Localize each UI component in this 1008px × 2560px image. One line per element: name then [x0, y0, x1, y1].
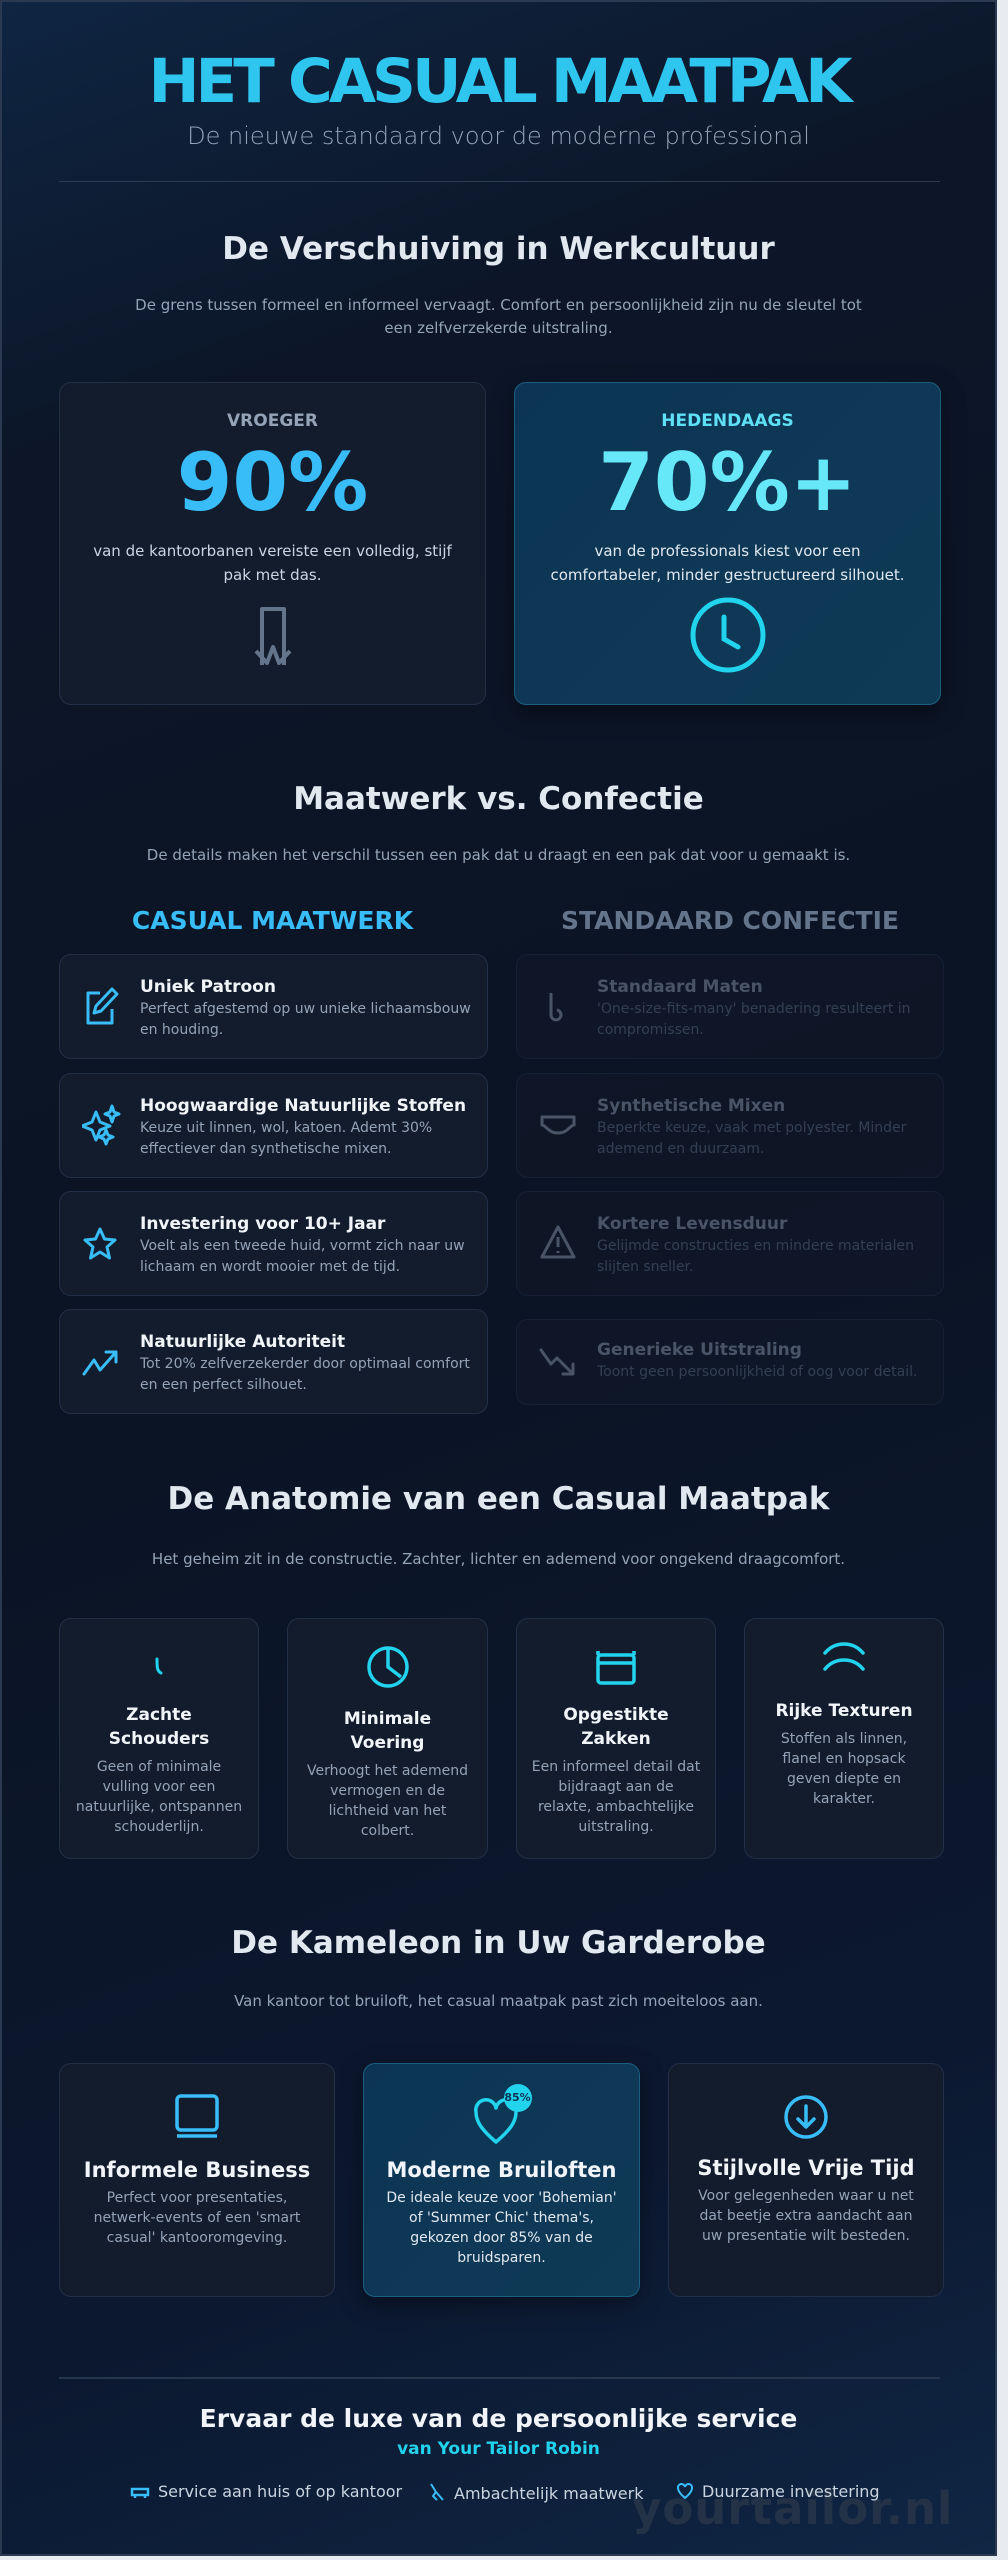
- icon: pocket: [596, 1651, 636, 1685]
- intro text: Van kantoor tot bruiloft, het casual maatpak past zich moeiteloos aan.: [234, 1992, 763, 2010]
- footer subheading: van Your Tailor Robin: [397, 2439, 600, 2459]
- card: rijke texturen: Stoffen als linnen, flanel en hopsack geven diepte en karakter.: [781, 1731, 907, 1807]
- watermark: yourtailor.nl: [632, 2482, 953, 2535]
- row: autoriteit: Tot 20% zelfverzekerder door optimaal comfort en een perfect silhouet.: [140, 1356, 470, 1393]
- icon: pie: [367, 1646, 409, 1688]
- row: kortere levensduur: [516, 1191, 944, 1296]
- row: synthetische mixen: Synthetische Mixen: [597, 1096, 785, 1116]
- icon: pencil: [86, 987, 119, 1024]
- stat: 70%+: 70%+: [598, 436, 857, 529]
- icon: clock: [690, 598, 766, 672]
- icon: trending down: [540, 1348, 574, 1376]
- card: minimale voering: [287, 1618, 488, 1859]
- footer features: [130, 2482, 880, 2503]
- card: rijke texturen: [744, 1618, 944, 1859]
- row: investering: Investering voor 10+ Jaar: [140, 1214, 385, 1234]
- icon: heart with badge: [474, 2084, 532, 2144]
- heading: anatomie: De Anatomie van een Casual Maatpak: [167, 1481, 830, 1517]
- card: informele business: [59, 2063, 335, 2297]
- card: informele business: Informele Business: [84, 2158, 310, 2182]
- row: kortere levensduur: Gelijmde constructies en mindere materialen slijten sneller.: [597, 1238, 914, 1275]
- icon: star: [83, 1228, 116, 1260]
- icon: laptop: [175, 2094, 219, 2138]
- card: zachte schouders: [59, 1618, 259, 1859]
- row: standaard maten: 'One-size-fits-many' benadering resulteert in compromissen.: [597, 1001, 911, 1038]
- card: opgestikte zakken: [516, 1618, 716, 1859]
- heading: werkcultuur: De Verschuiving in Werkcultuur: [222, 231, 775, 267]
- column heading: casual maatwerk: CASUAL MAATWERK: [132, 906, 413, 935]
- card: opgestikte zakken: Een informeel detail dat bijdraagt aan de relaxte, ambachtelijke uitstraling.: [532, 1759, 700, 1835]
- intro text: [135, 296, 862, 337]
- icon: heart with badge: 85%: [504, 2091, 531, 2104]
- row: synthetische mixen: Beperkte keuze, vaak met polyester. Minder ademend en duurzaam.: [597, 1120, 906, 1157]
- card: informele business: Perfect voor presentaties, netwerk-events of een 'smart casual' kantooromgeving.: [94, 2190, 300, 2246]
- row: uniek patroon: Uniek Patroon: [140, 977, 276, 997]
- icon: waves: [823, 1642, 865, 1671]
- row: generieke uitstraling: Generieke Uitstraling: [597, 1340, 802, 1360]
- card: vrije tijd: [668, 2063, 944, 2297]
- text: van de professionals kiest voor een comfortabeler, minder gestructureerd silhouet.: [550, 542, 905, 584]
- card: vrije tijd: Stijlvolle Vrije Tijd: [697, 2156, 915, 2180]
- footer heading: Ervaar de luxe van de persoonlijke service: [200, 2404, 797, 2433]
- icon: shoulder: [156, 1658, 163, 1675]
- card: vrije tijd: Voor gelegenheden waar u net dat beetje extra aandacht aan uw presentatie wilt besteden.: [698, 2188, 914, 2244]
- label: HEDENDAAGS: [661, 411, 794, 431]
- row: natuurlijke stoffen: [59, 1073, 488, 1178]
- row: kortere levensduur: Kortere Levensduur: [597, 1214, 787, 1234]
- card: zachte schouders: Zachte: [126, 1705, 192, 1725]
- card: minimale voering: Minimale: [344, 1709, 431, 1729]
- card: rijke texturen: Rijke Texturen: [775, 1701, 913, 1721]
- label: VROEGER: [227, 411, 318, 431]
- icon: size: [550, 993, 562, 1022]
- row: natuurlijke stoffen: Keuze uit linnen, wol, katoen. Ademt 30% effectiever dan synthetische mixen.: [140, 1120, 432, 1157]
- row: uniek patroon: Perfect afgestemd op uw unieke lichaamsbouw en houding.: [140, 1001, 471, 1038]
- icon: warning: [540, 1225, 576, 1258]
- intro text: een zelfverzekerde uitstraling.: [384, 319, 613, 337]
- icon: tie: [254, 607, 292, 666]
- icon: trending up: [82, 1350, 118, 1376]
- row: synthetische mixen: [516, 1073, 944, 1178]
- feature: ambachtelijk: Ambachtelijk maatwerk: [454, 2484, 643, 2503]
- intro text: Het geheim zit in de constructie. Zachter, lichter en ademend voor ongekend draagcomfort.: [152, 1550, 845, 1568]
- card: moderne bruiloften: Moderne Bruiloften: [387, 2158, 616, 2182]
- row: generieke uitstraling: Toont geen persoonlijkheid of oog voor detail.: [597, 1364, 917, 1380]
- row: investering: [59, 1191, 488, 1296]
- heading: kameleon: De Kameleon in Uw Garderobe: [231, 1925, 766, 1961]
- card: minimale voering: Verhoogt het ademend vermogen en de lichtheid van het colbert.: [307, 1763, 468, 1839]
- icon: arrow down circle: [784, 2095, 828, 2139]
- panel: vroeger: [59, 382, 486, 705]
- heading: maatwerk vs confectie: Maatwerk vs. Confectie: [293, 781, 704, 817]
- subtitle: De nieuwe standaard voor de moderne professional: [187, 122, 810, 150]
- card: opgestikte zakken: Opgestikte: [563, 1705, 669, 1725]
- feature: duurzaam: Duurzame investering: [702, 2482, 880, 2501]
- row: standaard maten: Standaard Maten: [597, 977, 763, 997]
- row: standaard maten: [516, 954, 944, 1059]
- card: moderne bruiloften: [363, 2063, 640, 2297]
- panel: hedendaags: [514, 382, 941, 705]
- icon: fabric: [540, 1116, 576, 1134]
- intro text: De details maken het verschil tussen een pak dat u draagt en een pak dat voor u gemaakt is.: [147, 846, 850, 864]
- stat: 90%: 90%: [177, 436, 368, 529]
- feature: service: Service aan huis of op kantoor: [158, 2482, 402, 2501]
- row: autoriteit: Natuurlijke Autoriteit: [140, 1332, 345, 1352]
- card: zachte schouders: Geen of minimale vulling voor een natuurlijke, ontspannen schouderlijn.: [76, 1759, 242, 1835]
- title: HET CASUAL MAATPAK: [148, 46, 849, 117]
- intro text: De grens tussen formeel en informeel vervaagt. Comfort en persoonlijkheid zijn nu de sleutel tot: [135, 296, 862, 314]
- text: van de kantoorbanen vereiste een volledig, stijf pak met das.: [93, 542, 452, 584]
- row: generieke uitstraling: [516, 1319, 944, 1405]
- card: opgestikte zakken: Zakken: [581, 1729, 651, 1749]
- row: uniek patroon: [59, 954, 488, 1059]
- row: autoriteit: [59, 1309, 488, 1414]
- column heading: standaard confectie: STANDAARD CONFECTIE: [561, 906, 899, 935]
- card: moderne bruiloften: De ideale keuze voor 'Bohemian' of 'Summer Chic' thema's, gekozen door 85% van de bruidsparen.: [386, 2190, 617, 2266]
- card: zachte schouders: Schouders: [109, 1729, 209, 1749]
- row: natuurlijke stoffen: Hoogwaardige Natuurlijke Stoffen: [140, 1096, 466, 1116]
- card: minimale voering: Voering: [351, 1733, 424, 1753]
- row: investering: Voelt als een tweede huid, vormt zich naar uw lichaam en wordt mooier met de tijd.: [140, 1238, 465, 1275]
- icon: sparkles: [82, 1104, 120, 1146]
